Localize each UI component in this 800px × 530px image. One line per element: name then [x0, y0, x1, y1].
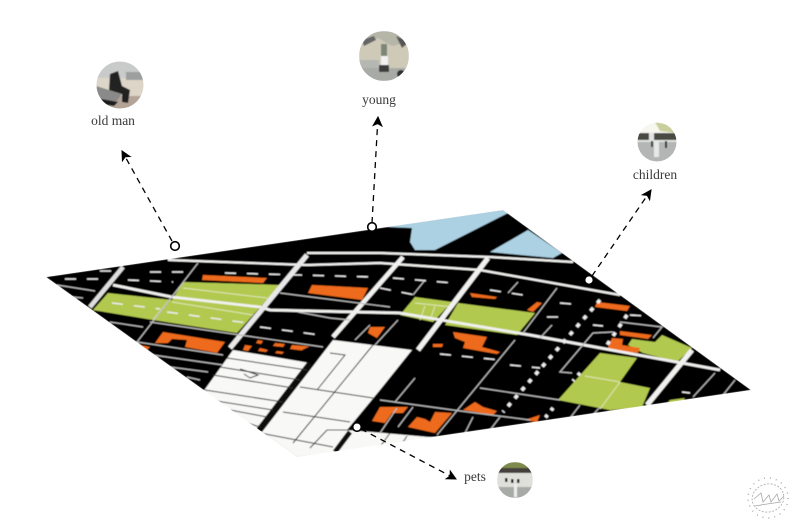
- photo: young: [359, 31, 409, 81]
- watermark stamp: [748, 478, 788, 518]
- photo: pets: [497, 462, 533, 498]
- photo: children: [637, 122, 677, 162]
- orange buildings: [140, 275, 652, 433]
- label: pets: pets: [464, 469, 486, 484]
- leader: old man: [122, 151, 179, 250]
- leader: children: [585, 190, 651, 284]
- map: perspective site plan: [46, 210, 751, 457]
- label: children: children: [633, 167, 677, 182]
- leader: young: [368, 117, 378, 231]
- water areas: [387, 210, 562, 258]
- thin gray streets: [57, 263, 735, 435]
- road dashes: [65, 271, 690, 393]
- green inner lines: [153, 283, 620, 409]
- green spaces: [93, 282, 692, 410]
- white plot block: [203, 340, 440, 457]
- label: young: young: [362, 92, 396, 107]
- white roads: [90, 253, 720, 405]
- photo: old man: [96, 61, 144, 109]
- dotted central road: [503, 300, 600, 412]
- label: old man: old man: [91, 113, 135, 128]
- leader: pets: [353, 423, 456, 479]
- map base: black blocks: [46, 210, 751, 457]
